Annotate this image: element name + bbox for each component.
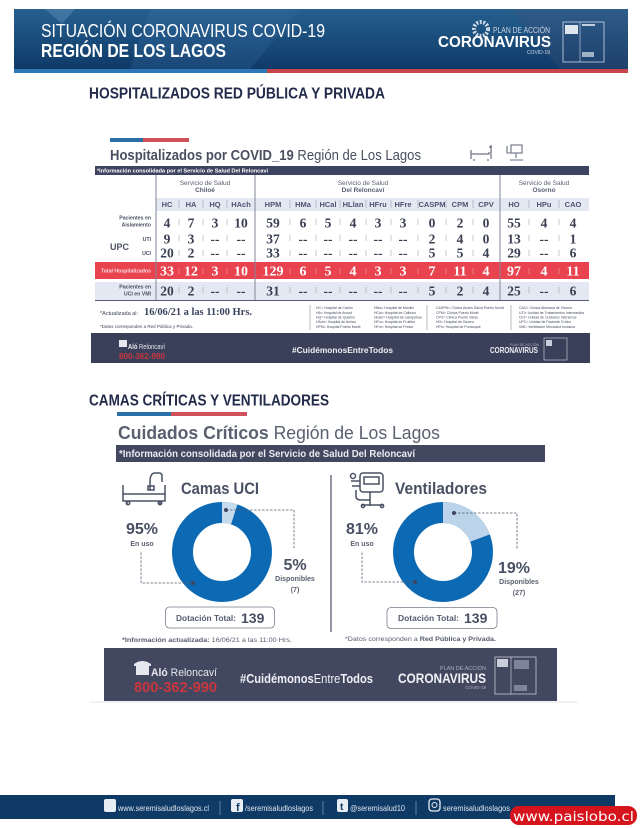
update note <box>100 307 252 329</box>
row: UCI en VMI: -- <box>210 284 220 298</box>
row: UTI: -- <box>324 232 332 246</box>
row: total hospitalizados: 11 <box>566 264 580 280</box>
header title <box>41 20 325 61</box>
row: UCI en VMI: 5 <box>429 284 436 298</box>
row labels: UTI <box>143 237 152 243</box>
info bar <box>116 445 545 462</box>
column headers: HLlan <box>343 200 364 209</box>
header coronavirus logo: CORONAVIRUS <box>438 34 551 51</box>
row: UCI: 20 <box>160 246 174 260</box>
row: aislamiento: 3 <box>400 216 407 230</box>
row: UTI <box>164 232 577 246</box>
row: UCI en VMI: -- <box>348 284 358 298</box>
legend: CAO= Clínica Alemana de Osorno <box>519 306 572 310</box>
panel footer band: #CuidémonosEntreTodos <box>240 672 373 686</box>
heading: ventiladores: Ventiladores <box>395 480 487 498</box>
legend: HMa= Hospital de Maullín <box>374 306 414 310</box>
callout: 5% disponibles: 5% <box>283 557 307 574</box>
footer links <box>104 799 510 814</box>
row: UTI: -- <box>210 232 220 246</box>
update note: 16/06/21 a las 11:00 Hrs. <box>144 307 252 318</box>
legend: CASPM= Clínica Andes Salud Puerto Montt <box>436 306 504 310</box>
row: aislamiento: 4 <box>570 216 577 230</box>
row: UCI: -- <box>236 246 246 260</box>
row: aislamiento: 59 <box>266 216 280 230</box>
column headers: CPM <box>452 200 468 209</box>
row: UCI en VMI: -- <box>324 284 332 298</box>
footer links: /seremisaludloslagos <box>245 804 313 813</box>
row: UCI en VMI: 31 <box>266 284 280 298</box>
footer links: t <box>340 802 344 813</box>
row: UTI: -- <box>398 232 408 246</box>
legend: VMI= Ventilación Mecánica Invasiva <box>519 325 575 329</box>
icon: hospital bed <box>123 473 165 505</box>
footer links: f <box>236 802 240 814</box>
row: aislamiento <box>164 216 577 230</box>
row: total hospitalizados: 12 <box>184 264 198 280</box>
legend: HLlan= Hospital de Llanquihue <box>374 316 422 320</box>
legend: UCI= Unidad de Cuidados Intensivos <box>519 316 577 320</box>
row: total hospitalizados: 4 <box>482 264 490 280</box>
note: actualizada: *Información actualizada: 16/06/21 a las 11:00 Hrs. <box>122 637 292 644</box>
row: UCI en VMI <box>95 282 589 300</box>
callout: 81% en uso: 81% <box>346 521 378 538</box>
row: aislamiento: 2 <box>457 216 464 230</box>
panel footer band: CORONAVIRUS <box>398 671 486 686</box>
panel footer band: PLAN DE ACCIÓN <box>440 665 486 672</box>
panel footer band <box>104 648 557 701</box>
callout: 81% en uso <box>346 521 417 584</box>
callout: 19% disponibles <box>452 511 539 597</box>
callout: 95% en uso <box>126 521 195 585</box>
column headers: CAO <box>565 200 581 209</box>
header coronavirus logo: PLAN DE ACCIÓN <box>493 26 550 35</box>
column headers: HPu <box>536 200 552 209</box>
legend: HAch= Hospital de Achao <box>316 320 356 324</box>
legend: CPV= Clínica Puerto Varas <box>436 316 478 320</box>
row: UTI: -- <box>374 232 382 246</box>
column headers: HCal <box>319 200 337 209</box>
legend: HFre= Hospital de Fresia <box>374 325 413 329</box>
service headers: Osorno <box>532 187 556 194</box>
heading: camas criticas: CAMAS CRÍTICAS Y VENTILADORES <box>89 392 329 410</box>
total: camas UCI <box>166 607 274 628</box>
row: aislamiento: 6 <box>300 216 307 230</box>
row: UCI en VMI: 6 <box>570 284 577 298</box>
callout: 95% en uso: En uso <box>130 541 154 548</box>
row: UCI: 6 <box>570 246 577 260</box>
row: aislamiento: 10 <box>234 216 248 230</box>
row: UCI: -- <box>398 246 408 260</box>
callout: 5% disponibles: Disponibles <box>275 576 315 583</box>
column headers: HMa <box>295 200 312 209</box>
icon: ventilator small <box>507 145 523 160</box>
row labels: UPC <box>110 242 130 252</box>
panel footer band: 800-362-990 <box>134 680 217 696</box>
table footer band <box>91 333 590 363</box>
column headers: HA <box>186 200 197 209</box>
row: total hospitalizados: 3 <box>374 264 382 280</box>
info bar: *Información consolidada por el Servicio de Salud Del Reloncaví <box>119 449 416 460</box>
row: UTI: -- <box>298 232 308 246</box>
total: camas UCI: 139 <box>241 610 265 626</box>
icon: ventilator <box>350 473 384 508</box>
legend: UPC= Unidad de Paciente Crítico <box>519 320 571 324</box>
callout: 5% disponibles <box>224 508 315 594</box>
row: UCI <box>160 246 577 260</box>
row: UTI: 1 <box>570 232 577 246</box>
column headers: CPV <box>478 200 494 209</box>
heading: hospitalizados: HOSPITALIZADOS RED PÚBLICA Y PRIVADA <box>89 84 385 102</box>
legend: UTI= Unidad de Tratamientos Intermedios <box>519 311 584 315</box>
row: aislamiento: 4 <box>541 216 548 230</box>
total: ventiladores: 139 <box>464 610 488 626</box>
legend: CPM= Clínica Puerto Montt <box>436 311 479 315</box>
info bar <box>95 166 589 175</box>
column headers: CASPM <box>418 200 446 209</box>
footer links: seremisaludloslagos <box>443 804 510 813</box>
row: UCI: 2 <box>188 246 195 260</box>
row: UCI en VMI: 2 <box>188 284 195 298</box>
legend: HO= Hospital de Osorno <box>436 320 474 324</box>
row: UCI: -- <box>298 246 308 260</box>
row: UTI: 9 <box>164 232 171 246</box>
column headers: HFru <box>369 200 387 209</box>
row: UCI en VMI: -- <box>540 284 548 298</box>
row: UCI: 29 <box>507 246 521 260</box>
legend <box>310 305 584 330</box>
icon: bed small <box>471 145 492 161</box>
row: total hospitalizados: 7 <box>428 264 436 280</box>
header ministry logo <box>563 22 604 62</box>
update note: *Actualizada al: <box>100 311 138 317</box>
row: UCI en VMI: Pacientes en <box>119 284 151 290</box>
table footer band: Aló Reloncaví <box>128 344 165 351</box>
callout: 19% disponibles: (27) <box>513 590 525 597</box>
row: UCI: 4 <box>483 246 490 260</box>
row labels <box>110 216 152 257</box>
callout: 19% disponibles: 19% <box>498 560 530 577</box>
column headers <box>162 200 581 209</box>
panel: hospitalizados table <box>91 138 590 363</box>
row: UTI: -- <box>540 232 548 246</box>
total: ventiladores: Dotación Total: <box>398 613 459 623</box>
service headers: Servicio de Salud <box>519 180 570 187</box>
icon: phone <box>134 661 151 675</box>
total: camas UCI: Dotación Total: <box>176 613 236 623</box>
panel title: Cuidados Críticos Región de Los Lagos <box>118 422 440 443</box>
row: UCI en VMI: -- <box>236 284 246 298</box>
header title: SITUACIÓN CORONAVIRUS COVID-19 <box>41 20 325 41</box>
row: total hospitalizados: Total Hospitalizados <box>101 268 151 274</box>
donut: camas UCI <box>182 512 262 592</box>
header title: REGIÓN DE LOS LAGOS <box>41 40 226 61</box>
row: UTI: 3 <box>188 232 195 246</box>
row: total hospitalizados: 4 <box>350 264 356 280</box>
info bar: *Información consolidada por el Servicio de Salud Del Reloncaví <box>97 168 268 174</box>
row: aislamiento: 3 <box>212 216 219 230</box>
row: total hospitalizados: 33 <box>160 264 174 280</box>
watermark: www.paislobo.cl <box>513 809 634 825</box>
table footer band: PLAN DE ACCIÓN <box>510 342 539 347</box>
row: UTI: 4 <box>457 232 464 246</box>
legend: HCal= Hospital de Calbuco <box>374 311 416 315</box>
update note: *Datos corresponden a Red Pública y Privada. <box>100 324 193 329</box>
legend: HA= Hospital de Ancud <box>316 311 352 315</box>
row: total hospitalizados: 3 <box>212 264 218 280</box>
row: aislamiento: 7 <box>188 216 195 230</box>
legend: HFru= Hospital de Frutillar <box>374 320 416 324</box>
row: UTI: 2 <box>429 232 436 246</box>
legend: HQ= Hospital de Quellón <box>316 316 355 320</box>
row: aislamiento: 3 <box>375 216 382 230</box>
legend: HPM= Hospital Puerto Montt <box>316 325 360 329</box>
service headers: Servicio de Salud <box>338 180 389 187</box>
row: UTI: 0 <box>483 232 490 246</box>
legend: HC= Hospital de Castro <box>316 306 353 310</box>
row: aislamiento: 0 <box>429 216 436 230</box>
footer links: @seremisalud10 <box>350 804 405 813</box>
column headers: HAch <box>231 200 251 209</box>
table title: Hospitalizados por COVID_19 Región de Los Lagos <box>110 148 421 164</box>
legend: HPu= Hospital de Purranque <box>436 325 481 329</box>
row: UCI: -- <box>348 246 358 260</box>
table footer band: #CuidémonosEntreTodos <box>292 345 393 355</box>
row: total hospitalizados: 4 <box>540 264 548 280</box>
service headers: Servicio de Salud <box>180 180 231 187</box>
row: UTI: -- <box>236 232 246 246</box>
page header banner <box>14 9 628 73</box>
column headers: HQ <box>209 200 221 209</box>
service headers <box>180 180 570 194</box>
row: aislamiento: 4 <box>164 216 171 230</box>
row labels: Aislamiento <box>122 222 151 228</box>
row: UCI: 5 <box>457 246 464 260</box>
row: total hospitalizados: 11 <box>453 264 467 280</box>
row: UTI: -- <box>348 232 358 246</box>
callout: 81% en uso: En uso <box>350 541 374 548</box>
row labels: UCI <box>142 251 152 257</box>
row: UCI: -- <box>324 246 332 260</box>
callout: 5% disponibles: (7) <box>291 587 299 594</box>
row: total hospitalizados: 10 <box>234 264 248 280</box>
row: UTI: 37 <box>266 232 280 246</box>
row: UCI en VMI: -- <box>374 284 382 298</box>
callout: 19% disponibles: Disponibles <box>499 579 539 586</box>
page footer bar <box>0 795 615 819</box>
panel: cuidados criticos <box>90 412 578 702</box>
panel footer band: Aló Reloncaví <box>151 667 217 679</box>
service headers: Del Reloncaví <box>342 187 385 194</box>
column headers: HPM <box>265 200 281 209</box>
row: UTI: 13 <box>507 232 521 246</box>
row: total hospitalizados: 5 <box>324 264 332 280</box>
row: UCI: 33 <box>266 246 280 260</box>
column headers: HC <box>162 200 173 209</box>
row: UCI en VMI: 25 <box>507 284 521 298</box>
row: UCI en VMI: -- <box>398 284 408 298</box>
header coronavirus logo: COVID-19 <box>527 50 550 56</box>
row: UCI en VMI: 2 <box>457 284 464 298</box>
sub-header band <box>156 198 589 211</box>
donut: ventiladores <box>404 512 482 592</box>
row: aislamiento: 0 <box>483 216 490 230</box>
row: total hospitalizados <box>95 262 589 280</box>
row: total hospitalizados: 6 <box>300 264 306 280</box>
row: UCI en VMI: 20 <box>160 284 174 298</box>
panel footer band: COVID-19 <box>465 685 486 690</box>
row: UCI en VMI: UCI en VMI <box>124 292 152 298</box>
total: ventiladores <box>387 608 497 628</box>
header coronavirus logo <box>438 22 551 56</box>
callout: 95% en uso: 95% <box>126 521 158 538</box>
footer links: www.seremisaludloslagos.cl <box>117 804 209 813</box>
row: total hospitalizados: 3 <box>400 264 406 280</box>
row labels: Pacientes en <box>119 216 151 222</box>
row: aislamiento: 55 <box>507 216 521 230</box>
row: UCI en VMI: -- <box>298 284 308 298</box>
row: UCI: -- <box>374 246 382 260</box>
service headers: Chiloé <box>195 187 215 194</box>
row: UCI: -- <box>540 246 548 260</box>
row: total hospitalizados: 129 <box>262 264 284 280</box>
table footer band: CORONAVIRUS <box>490 346 539 355</box>
column headers: HFre <box>394 200 412 209</box>
row: total hospitalizados: 97 <box>507 264 521 280</box>
row: aislamiento: 4 <box>350 216 357 230</box>
row: UCI: 5 <box>429 246 436 260</box>
column headers: HO <box>508 200 520 209</box>
row: UCI: -- <box>210 246 220 260</box>
row: aislamiento: 5 <box>325 216 332 230</box>
row: UCI en VMI: 4 <box>483 284 490 298</box>
table footer band: 800-362-990 <box>119 351 165 361</box>
note: datos: *Datos corresponden a Red Pública y Privada. <box>345 636 496 643</box>
heading: camas UCI: Camas UCI <box>181 480 259 498</box>
